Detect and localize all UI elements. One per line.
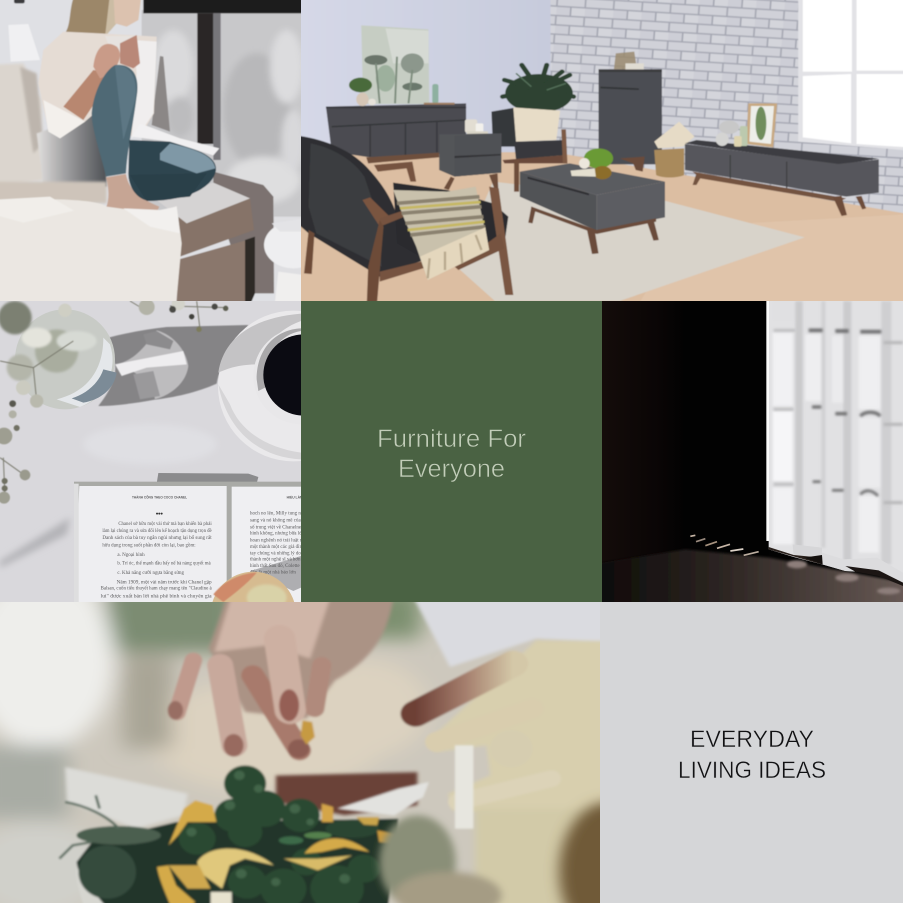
tagline text: Furniture For bbox=[377, 425, 526, 453]
sofa arm bbox=[213, 172, 274, 293]
page header left: THÀNH CÔNG THEO COCO CHANEL bbox=[132, 494, 187, 499]
white side table bbox=[264, 217, 323, 317]
open book bbox=[74, 482, 310, 602]
tagline text bbox=[678, 726, 826, 784]
left wall bbox=[286, 0, 552, 173]
page ornament: ●●● bbox=[156, 511, 163, 516]
foreground brown blur bbox=[559, 802, 659, 903]
apple bbox=[211, 572, 296, 657]
panel: grey tagline bbox=[600, 602, 903, 903]
tablet on wall bbox=[8, 24, 40, 62]
fork bbox=[337, 782, 429, 815]
brick wall bbox=[551, 0, 903, 220]
light slivers under dark curtain bbox=[690, 535, 759, 555]
back blanket bbox=[0, 63, 43, 187]
left page text: Chanel sở hữu một vài thứ mà bạn khiến bà phải bbox=[118, 522, 212, 527]
left page text: lui" được xuất bản lời nhà phê bình và chuyên gia bbox=[101, 595, 213, 600]
right hand bbox=[416, 640, 628, 903]
white sleeve bbox=[409, 589, 620, 667]
saucer bbox=[218, 311, 369, 461]
right page text: đến là một nhà báo lớn bbox=[250, 570, 296, 575]
left page text: Năm 1909, một vài năm trước khi Chanel gặp bbox=[117, 580, 212, 585]
right page text: tay chúng và những lý do đã bbox=[250, 551, 308, 556]
low TV console bbox=[685, 140, 879, 216]
window with frosted trees bbox=[142, 0, 317, 223]
flower sprigs bbox=[0, 297, 228, 504]
right page text: hoch no lên, Milly tung nhiều bbox=[250, 511, 310, 516]
tagline text: LIVING IDEAS bbox=[678, 757, 826, 784]
left page text bbox=[101, 522, 213, 600]
sofa base bbox=[157, 183, 255, 317]
salad bbox=[59, 765, 398, 903]
lemon piece held bbox=[301, 720, 315, 745]
panel: green tagline bbox=[301, 301, 602, 602]
right page text: hoan nghênh nó trái luật mà bbox=[250, 538, 307, 543]
right page text bbox=[250, 511, 310, 575]
knife blade bbox=[65, 767, 188, 829]
right page text: một thành một các giả đình bbox=[250, 545, 305, 550]
window bbox=[798, 0, 903, 152]
fabric folds bbox=[0, 424, 217, 568]
refracted light bbox=[115, 330, 188, 399]
photo: living room with grey furniture bbox=[301, 0, 903, 301]
console vases bbox=[716, 121, 748, 147]
sideboard bbox=[326, 103, 466, 163]
blurred background bbox=[0, 569, 429, 903]
counter and red bowl shadow bbox=[276, 772, 417, 815]
cups on side table bbox=[465, 119, 488, 135]
upright cushion bbox=[152, 56, 170, 132]
front armchair bbox=[289, 135, 513, 317]
glass vase with baby's breath bbox=[0, 301, 117, 409]
coffee cup bbox=[253, 328, 350, 424]
book shadow bbox=[157, 473, 258, 484]
rear armchair bbox=[491, 107, 567, 192]
page header right: HIỂU LÀM bbox=[287, 494, 303, 499]
plant bbox=[503, 65, 574, 113]
right page text: hình không, nhưng bữa lớn bbox=[250, 531, 305, 536]
coffee table bbox=[520, 163, 665, 254]
rug bbox=[456, 182, 805, 301]
photo: hands garnishing salad bbox=[0, 602, 600, 903]
right page text: hình thất Sau đó, Colette bbox=[250, 564, 300, 569]
left page text: Balsan, cuốn tiểu thuyết ham chạy mang tên "Claudine à bbox=[101, 586, 212, 592]
right page text: sang và nó không mê của chị bbox=[250, 518, 309, 523]
dark curtain bbox=[602, 301, 769, 564]
left page text: làm lại chúng ra và sửa đổi lên kế hoạch tận dụng trọn đề bbox=[102, 528, 212, 534]
photo: woman with mug on sofa bbox=[0, 0, 301, 301]
right page text: thành một nghệ sĩ và hơn bbox=[250, 558, 301, 563]
cushion and basket bbox=[654, 122, 695, 178]
tall cabinet bbox=[599, 52, 662, 172]
blurred foreground herbs bbox=[379, 815, 502, 903]
left page text: Danh sách của bà tuy ngắn ngủi nhưng lại bổ sung rất bbox=[102, 535, 212, 541]
decor on sideboard bbox=[349, 78, 455, 106]
left hand bbox=[168, 589, 394, 758]
table plant and brass pot bbox=[571, 148, 613, 179]
wood floor bbox=[286, 152, 903, 317]
curtain gap and shadow strip bbox=[769, 547, 822, 564]
side table bbox=[439, 133, 501, 190]
shadow on table bbox=[98, 325, 248, 406]
shaded body bbox=[37, 110, 107, 187]
light on carpet bbox=[787, 560, 900, 594]
right page text: số trung việt về Chanelne to bbox=[250, 525, 307, 530]
tagline text bbox=[377, 425, 526, 483]
sheer curtain bbox=[766, 301, 903, 584]
left page text: hữu dụng trong suốt phần đời còn lại, bao gồm: bbox=[102, 543, 196, 548]
striped throw blanket bbox=[393, 187, 489, 280]
left page text: c. Khả năng cưỡi ngựa bằng sừng bbox=[117, 570, 184, 576]
framed leaf print bbox=[746, 103, 777, 147]
photo: dark room and sheer curtain bbox=[602, 301, 903, 602]
woman bbox=[38, 0, 219, 212]
photo: open book, coffee and flowers bbox=[0, 301, 310, 602]
carpet floor bbox=[592, 549, 903, 614]
seat blanket bbox=[0, 182, 182, 317]
left page text: b. Trí óc, thể mạnh đầu bấy nể bà nàng quyết mà bbox=[117, 560, 211, 566]
tagline text: Everyone bbox=[398, 455, 505, 483]
left page text: a. Ngoại hình bbox=[117, 553, 145, 558]
painting with botanical print bbox=[361, 25, 429, 104]
tagline text: EVERYDAY bbox=[690, 726, 814, 753]
